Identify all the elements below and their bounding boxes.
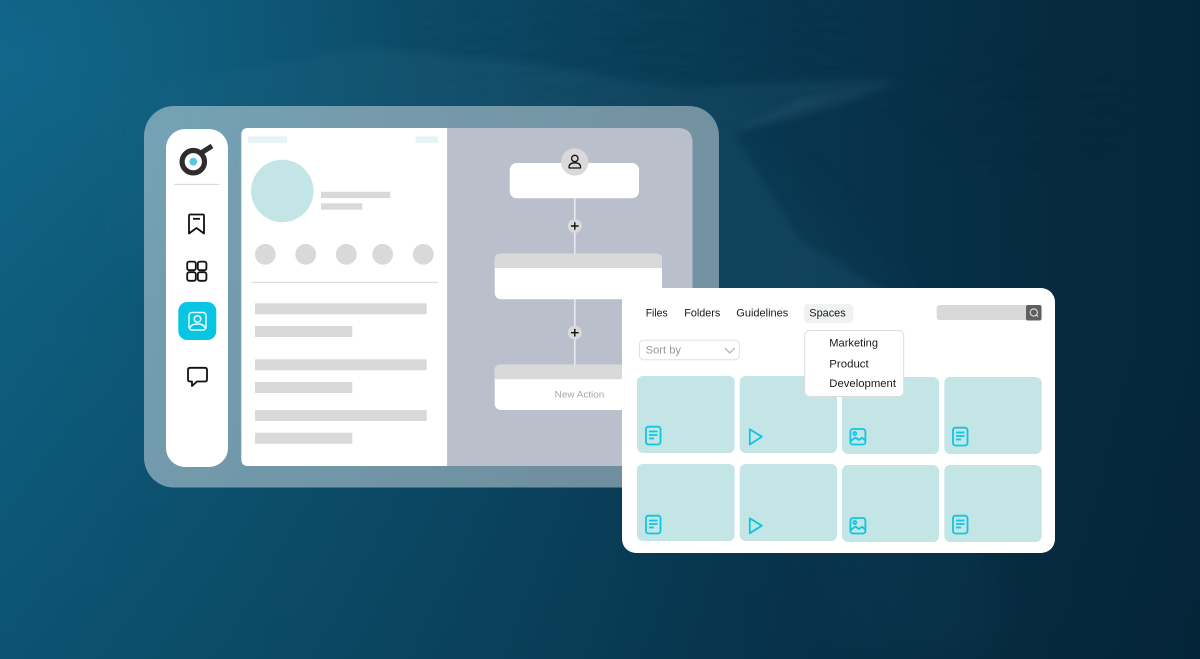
panel: sidebar [166,129,228,467]
spaces dropdown menu [805,330,904,396]
sort by dropdown: Sort by [646,344,681,356]
avatar placeholder [251,160,314,222]
navigation tabs: Guidelines [736,308,789,320]
panel: file browser [622,288,1055,553]
navigation tabs: Files [646,308,668,320]
icon: active profile button [178,302,216,340]
workflow card: step [495,254,662,299]
icon: add step [568,219,582,233]
navigation tabs: Folders [684,308,721,320]
panel: translucent app window [144,106,719,488]
icon: play [750,429,762,444]
spaces dropdown menu: Marketing [829,338,878,350]
navigation tabs [646,304,853,323]
icon: person [569,155,581,168]
icon: image [850,429,865,444]
icon: document [646,516,660,534]
name placeholder [321,192,390,210]
file icons [646,427,968,534]
header tabs [248,136,438,143]
navigation tabs: Spaces [809,308,846,320]
spaces dropdown menu: Product [829,359,869,371]
text placeholders [255,303,427,444]
icon: play [750,518,762,533]
panel: main window [241,128,693,466]
workflow card: new action: New Action [555,390,604,401]
profile column [248,136,438,444]
icon: grid [187,262,206,281]
icon: chat bubble [188,368,207,386]
workflow card: new action [495,365,640,410]
sort by dropdown [640,340,739,360]
icon: bookmark [189,214,204,234]
workflow diagram [495,148,662,410]
icon: image [850,518,865,534]
status dots [255,244,434,265]
icon: document [646,427,660,444]
icon: logo [182,146,212,173]
icon: document [953,428,968,446]
search bar [937,305,1042,320]
workflow card: trigger [510,148,639,198]
icon: add step [568,326,582,340]
spaces dropdown menu: Development [829,378,896,390]
file cards [637,376,1042,542]
icon: document [953,516,968,534]
